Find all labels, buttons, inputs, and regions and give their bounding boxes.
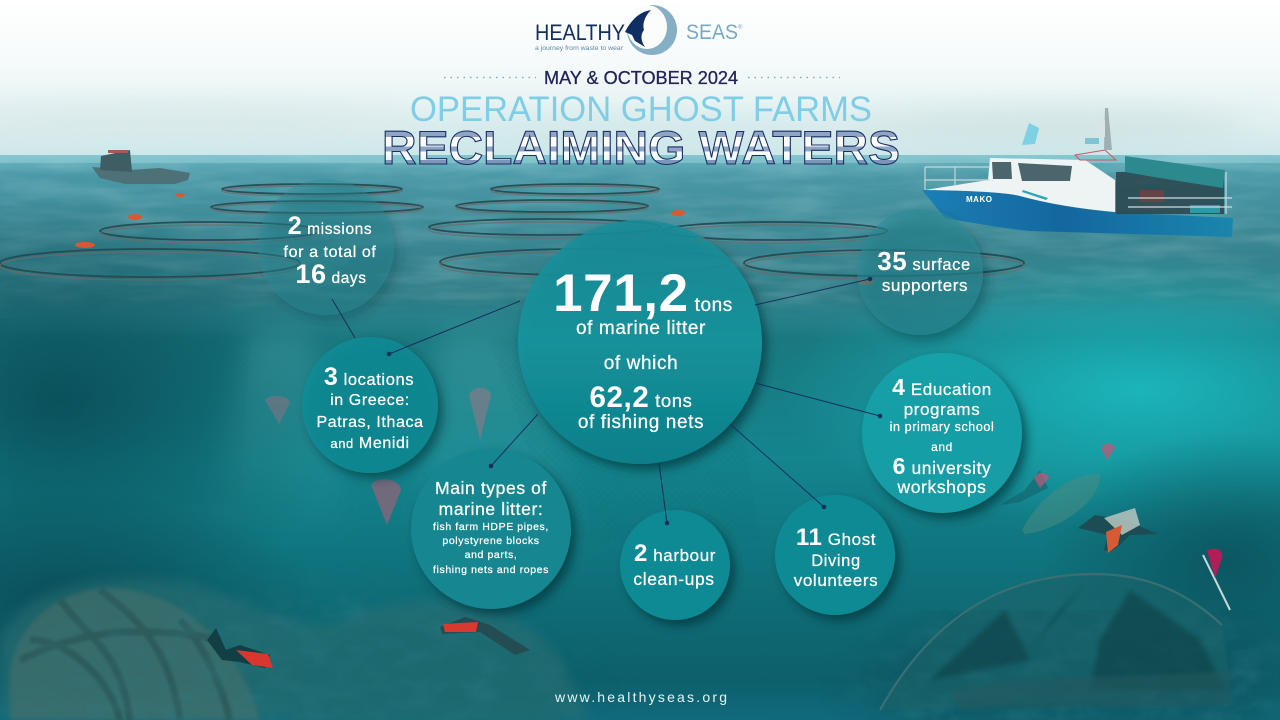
bubble: main types of marine litter: and parts,	[465, 549, 517, 561]
background: sky	[0, 0, 1280, 165]
floating jellyfish buoys	[265, 388, 1115, 525]
sunken rowboat	[1022, 474, 1100, 534]
date line: MAY & OCTOBER 2024	[544, 68, 738, 88]
bubble: main types of marine litter: polystyrene blocks	[442, 535, 540, 547]
seabed: net pile and rocks, left	[0, 578, 586, 720]
hanging net: left	[10, 335, 250, 520]
flag and mast	[1022, 123, 1039, 145]
logo: Healthy Seas: a journey from waste to wear	[535, 46, 623, 52]
bubble: 171,2 tons main figure: of marine litter	[576, 318, 706, 339]
bubble: 2 harbour clean-ups	[620, 510, 730, 620]
bubble: 3 locations: Patras, Ithaca	[316, 414, 424, 431]
bubble: education programs: programs	[904, 400, 980, 419]
bubble: 3 locations	[302, 337, 438, 473]
bubble: 171,2 tons main figure: 171,2 tons	[553, 264, 733, 323]
bubble: education programs: in primary school	[890, 420, 994, 434]
hull	[922, 190, 1233, 237]
bubble: main types of marine litter: Main types of	[435, 478, 547, 498]
sunken fish farm ring with nets	[880, 549, 1230, 710]
diver: right, with tank	[1078, 508, 1158, 553]
boat: MAKO	[922, 108, 1233, 237]
bubble: education programs: workshops	[896, 477, 987, 497]
logo: Healthy Seas: HEALTHY	[535, 20, 625, 45]
logo: Healthy Seas: ®	[738, 24, 743, 31]
bubble: 2 missions	[258, 179, 394, 315]
bubble: 171,2 tons main figure: of fishing nets	[578, 412, 704, 433]
bubble: 2 harbour clean-ups: 2 harbour	[634, 540, 716, 567]
connector lines	[332, 277, 882, 525]
bubble: 35 surface supporters: supporters	[882, 276, 968, 295]
website url: www.healthyseas.org	[554, 689, 727, 705]
background: sea surface	[0, 155, 1280, 330]
hanging net: centre	[490, 340, 760, 540]
bubble: 35 surface supporters	[857, 209, 983, 335]
bubble: main types of marine litter	[411, 449, 571, 609]
bubble: 171,2 tons main figure	[518, 220, 762, 464]
diver: left	[207, 628, 273, 668]
background: underwater	[0, 190, 1280, 720]
bubble: main types of marine litter: fishing nets and ropes	[433, 564, 549, 576]
diver: centre	[440, 617, 530, 655]
bubble: 11 Ghost Diving volunteers: Diving	[811, 552, 861, 570]
bubble: 2 missions: for a total of	[284, 244, 376, 261]
bubble: 2 missions: 16 days	[295, 259, 367, 289]
faint diver with bubbles	[1000, 470, 1048, 505]
fish farm rings at the surface	[0, 184, 1024, 280]
title: Reclaiming Waters: RECLAIMING WATERS	[382, 121, 900, 174]
title: Operation Ghost Farms: OPERATION GHOST FARMS	[410, 90, 872, 129]
bubble: 11 Ghost Diving volunteers	[775, 495, 895, 615]
stern canopy	[1125, 156, 1225, 188]
bubble: education programs: and	[931, 440, 953, 454]
bubble: education programs	[862, 353, 1022, 513]
boat: MAKO: MAKO	[966, 195, 992, 204]
small work boat, left	[92, 150, 190, 184]
bubble: 35 surface supporters: 35 surface	[877, 246, 971, 276]
bubble: 171,2 tons main figure: of which	[604, 353, 678, 374]
logo mark	[625, 5, 677, 55]
bubble: 11 Ghost Diving volunteers: volunteers	[794, 571, 878, 590]
bubble: 3 locations: and Menidi	[330, 435, 410, 452]
bubble: main types of marine litter: marine litter:	[439, 499, 543, 519]
seabed: right	[879, 631, 1277, 720]
bubble: main types of marine litter: fish farm HDPE pipes,	[433, 521, 549, 533]
orange buoys	[75, 193, 874, 285]
logo: Healthy Seas	[535, 5, 743, 55]
bubble: 171,2 tons main figure: 62,2 tons	[590, 381, 692, 414]
bubble: 11 Ghost Diving volunteers: 11 Ghost	[796, 524, 876, 551]
stern crew	[1116, 172, 1224, 214]
bubble: education programs: 6 university	[893, 453, 991, 479]
bubble: education programs: 4 Education	[892, 374, 992, 400]
logo: Healthy Seas: SEAS	[686, 21, 738, 44]
bubble: 3 locations: 3 locations	[324, 363, 414, 391]
deck and cabin	[925, 158, 1115, 212]
bubble: 3 locations: in Greece:	[330, 392, 410, 409]
bubble: 2 harbour clean-ups: clean-ups	[633, 569, 715, 589]
bubble: 2 missions: 2 missions	[288, 212, 372, 240]
